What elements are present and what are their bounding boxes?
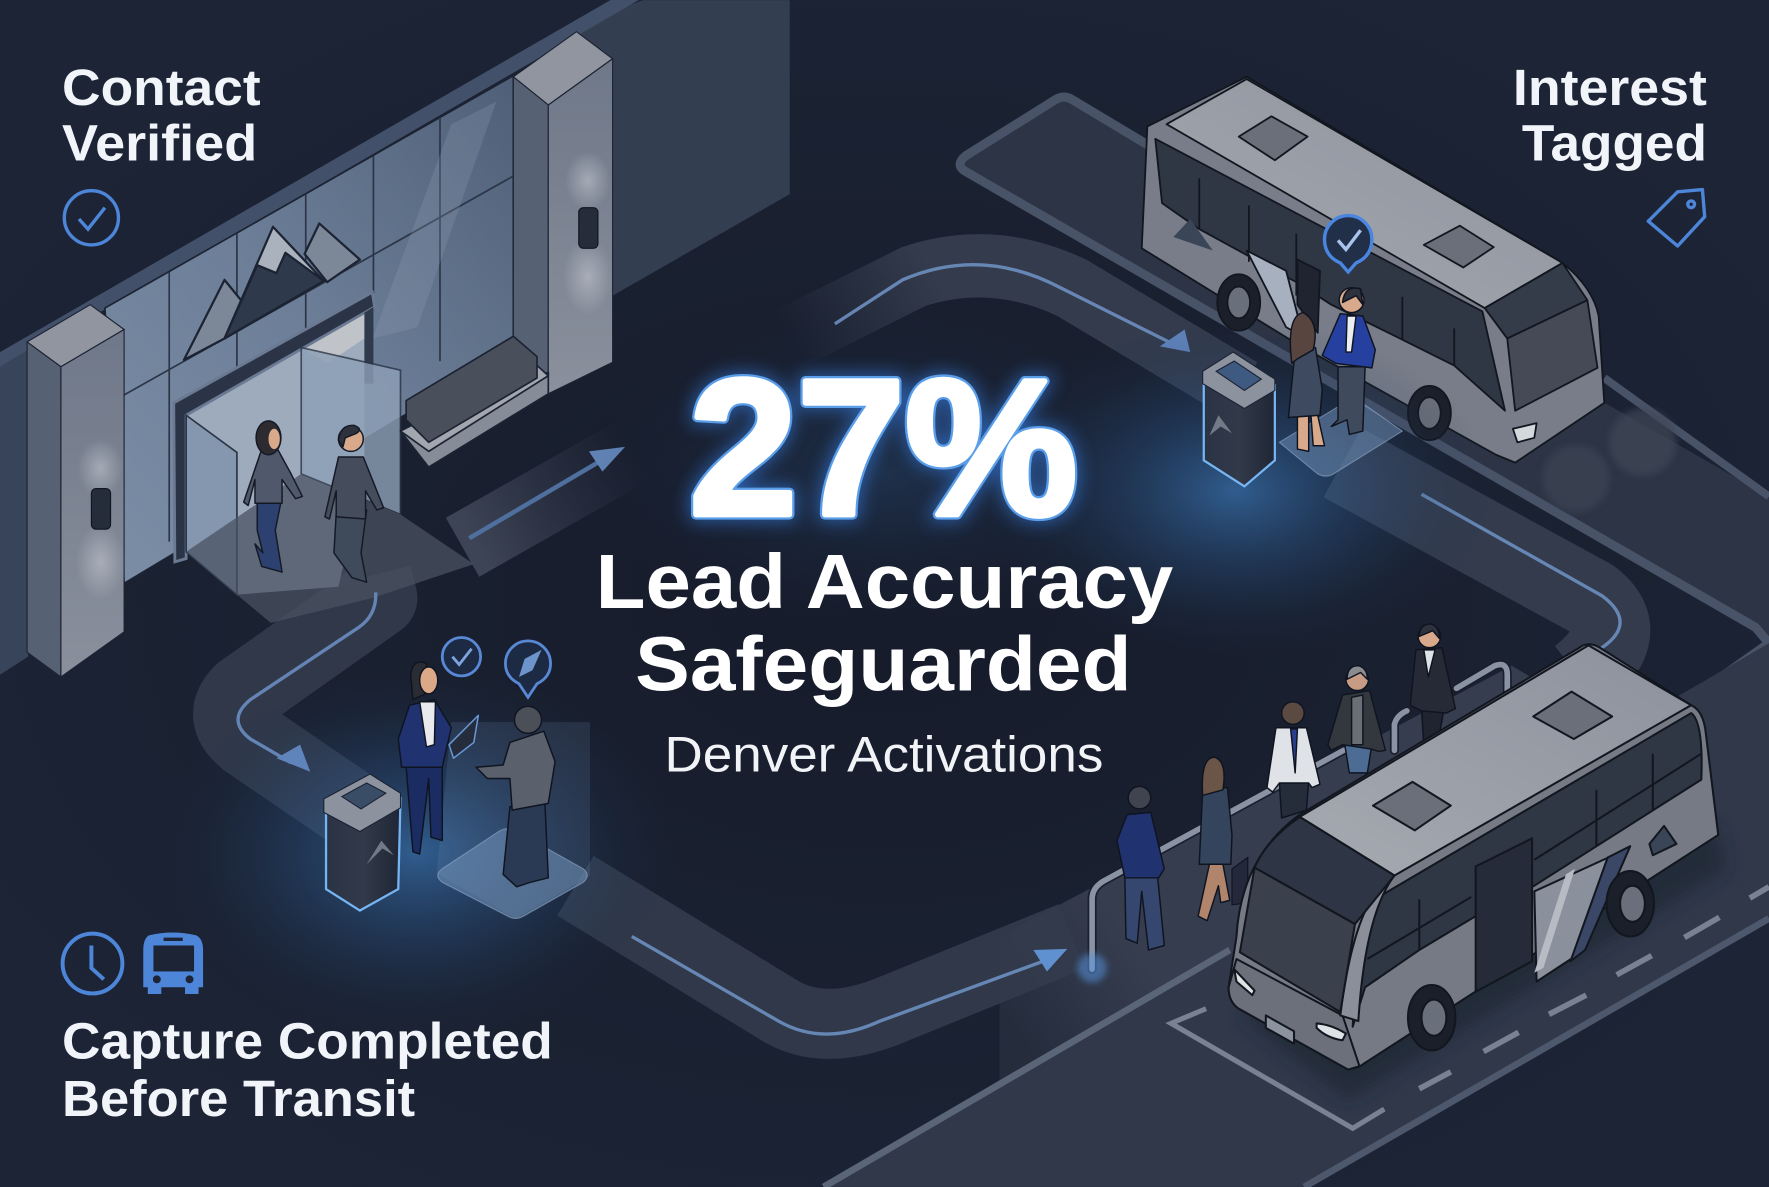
kiosk: upper right (1203, 352, 1275, 486)
label: capture completed before transit: Capture Completed (62, 1012, 553, 1069)
badge: check on upper bus (1324, 216, 1372, 272)
rails (1092, 665, 1507, 969)
upper bus: roof vent front (1424, 226, 1494, 267)
person: man at door (325, 425, 384, 582)
floor plate: upper kiosk (1279, 397, 1402, 476)
label: contact verified (62, 59, 261, 171)
upper bus: door (1297, 260, 1320, 333)
right pillar (513, 32, 613, 394)
light column behind kiosk 2 (437, 722, 590, 918)
badge: check at kiosk 2 (442, 637, 481, 676)
lower bus: window dividers (1367, 754, 1701, 959)
upper bus: headlight (1513, 423, 1537, 442)
label: contact verified: Contact (62, 59, 261, 116)
arrow: kiosk to lower bus (632, 936, 1067, 1034)
person: man white shirt (1267, 702, 1320, 818)
lower bus: plate (1266, 1015, 1294, 1044)
lower bus: window band (1353, 713, 1702, 1027)
metric: 27%: 27% (689, 340, 1077, 557)
upper bus: livery stripe (1247, 251, 1303, 336)
mountain logo on wall (184, 223, 360, 360)
lower bus: body (1229, 644, 1718, 1068)
building: far left wall (0, 350, 28, 675)
lower bus: windshield lower (1240, 868, 1355, 1012)
wall lamp: left (76, 439, 125, 600)
building: cornice (0, 0, 654, 370)
building: right wall (581, 0, 790, 296)
lower bus: front wheel (1408, 985, 1455, 1050)
lower bus: windshield upper (1255, 817, 1394, 924)
entrance floor light (186, 474, 474, 623)
label: interest tagged: Tagged (1522, 114, 1707, 171)
planter (401, 336, 548, 467)
upper bus: windshield upper (1485, 263, 1587, 339)
upper bus: body (1142, 77, 1604, 463)
upper bus (1142, 77, 1604, 463)
label: interest tagged (1513, 59, 1707, 171)
floor plate: kiosk 2 (438, 829, 587, 918)
road: lower bus lane (824, 643, 1769, 1187)
label: capture completed before transit: Before Transit (62, 1070, 415, 1127)
person: woman navy dress (1198, 757, 1232, 921)
person: man at plate (476, 706, 555, 887)
kiosk: lower left (324, 774, 401, 911)
lower bus: right headlight (1317, 1023, 1346, 1040)
icon: bus (143, 933, 203, 994)
icon: tag (1648, 190, 1705, 246)
arrow: door to headline (469, 447, 625, 538)
rail light (1077, 953, 1107, 983)
subheading: Denver Activations (665, 727, 1103, 783)
person glow: kiosk 2 (158, 666, 677, 1038)
upper bus: window dividers (1199, 178, 1454, 366)
metric: 27%: 27% (689, 340, 1077, 557)
headline: Safeguarded (635, 623, 1132, 708)
road: upper bus lane (960, 97, 1769, 722)
arrow: entrance to kiosk (238, 592, 376, 772)
upper bus: roof (1167, 79, 1563, 308)
building entrance door (174, 292, 401, 595)
person: woman at door (244, 421, 302, 572)
upper bus: roof vent rear (1239, 116, 1308, 160)
left pillar (27, 305, 125, 677)
arrow: headline to bus kiosk (835, 265, 1190, 352)
badge: compass at kiosk 2 (505, 641, 551, 697)
headline (596, 540, 1174, 708)
metric: 27%: 27% (689, 340, 1077, 557)
headline: Lead Accuracy (596, 540, 1174, 625)
lower bus: pillar (1340, 876, 1394, 1021)
lower bus: rear wheel (1607, 871, 1654, 936)
road dashes (1419, 887, 1769, 1089)
headline glow (590, 305, 1177, 643)
lower bus: front valance (1229, 959, 1359, 1070)
luggage (1232, 857, 1248, 905)
person: man navy suit (1117, 786, 1164, 950)
person: man black suit (1410, 624, 1455, 745)
lower bus: left headlight (1234, 969, 1255, 995)
label: contact verified: Verified (62, 114, 257, 171)
upper bus: side windows (1155, 139, 1505, 411)
upper bus: rear wheel (1217, 274, 1260, 331)
lower bus: roof vent rear (1533, 692, 1612, 739)
label: capture completed before transit (62, 1012, 553, 1127)
lower bus: roof (1300, 645, 1691, 876)
lower bus: door (1476, 838, 1532, 992)
person: gray-haired man (1328, 666, 1385, 773)
person: woman with tablet (398, 662, 478, 854)
parking bracket (1171, 1009, 1384, 1128)
icon: check circle (64, 191, 118, 245)
bus shadow (1241, 824, 1726, 1100)
lower bus (1229, 644, 1718, 1070)
person: man with blue blazer (1322, 288, 1375, 434)
icon: clock (63, 934, 122, 993)
wall lamp: right (563, 151, 613, 315)
person: woman in dress (1288, 313, 1324, 451)
path: visitor flow bands (233, 266, 1611, 1024)
upper bus: front wheel (1408, 386, 1451, 440)
building: glass wall (105, 76, 513, 583)
arrow: bus kiosk onward (1422, 494, 1620, 677)
lower bus: roof vent front (1373, 782, 1451, 830)
lower bus: livery stripe (1534, 855, 1613, 982)
upper bus: windshield lower (1507, 300, 1598, 411)
bus kiosk glow (976, 322, 1495, 660)
label: interest tagged: Interest (1513, 59, 1707, 116)
